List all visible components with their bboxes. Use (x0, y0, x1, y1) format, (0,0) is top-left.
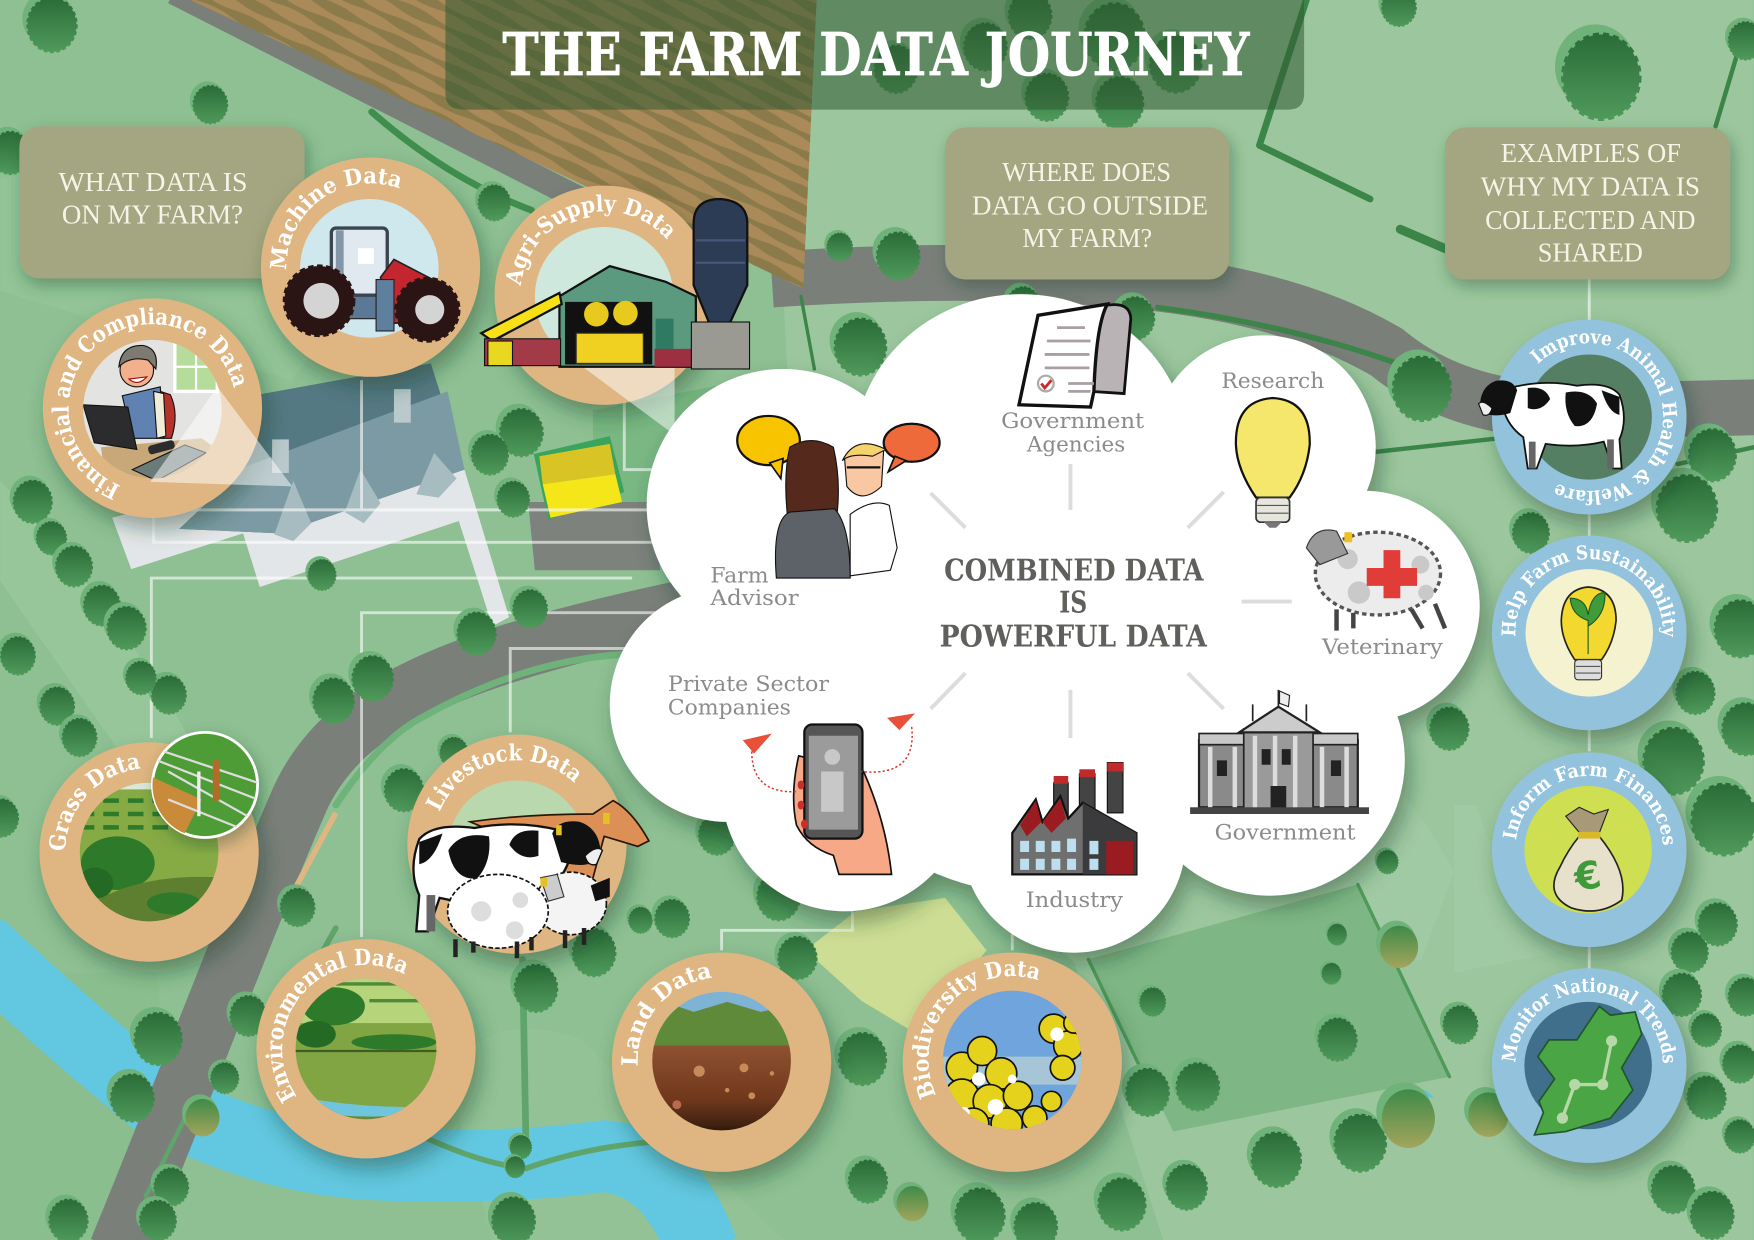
government agencies document: Government (1001, 409, 1144, 434)
private sector phone (668, 672, 915, 874)
callout: where data goes: DATA GO OUTSIDE (972, 191, 1208, 222)
veterinary sheep: Veterinary (1321, 635, 1443, 660)
farm advisor: Farm (710, 564, 769, 589)
circle: environmental data (252, 939, 492, 1182)
connector lines (151, 280, 1589, 971)
circle: land data: Land Data (621, 967, 712, 1066)
dark field (1088, 884, 1449, 1132)
cloud spokes (931, 464, 1292, 738)
industry factory (1012, 763, 1136, 913)
farm advisor: Advisor (709, 586, 799, 611)
circle: agri-supply data: Agri-Supply Data (506, 194, 673, 286)
circle: improve animal health and welfare (1478, 318, 1702, 536)
government agencies document (1001, 304, 1144, 458)
industry factory: Industry (1026, 888, 1124, 913)
title banner (445, 0, 1304, 110)
cloud panel (610, 294, 1480, 953)
yellow green meadow (805, 898, 987, 1034)
callout: why collected: SHARED (1538, 238, 1643, 269)
circle: grass data (34, 742, 274, 983)
inset: electric fence (152, 732, 258, 837)
circle: monitor national trends (1487, 967, 1703, 1185)
circle: financial and compliance data (38, 298, 292, 542)
heading: combined data: POWERFUL DATA (940, 619, 1207, 654)
government agencies document: Agencies (1026, 433, 1125, 458)
callout: what data: ON MY FARM? (62, 200, 243, 231)
circle: inform farm finances: Inform Farm Finances (1502, 766, 1673, 845)
farm advisor (709, 416, 940, 611)
circle: monitor national trends: Monitor National Trends (1501, 978, 1676, 1063)
veterinary sheep (1306, 530, 1445, 660)
government building: Government (1215, 821, 1356, 846)
farmyard and buildings (112, 363, 727, 626)
circle: help farm sustainability (1487, 534, 1703, 752)
callout: why collected (1445, 127, 1730, 280)
title banner: THE FARM DATA JOURNEY (502, 19, 1250, 89)
river (0, 945, 703, 1240)
circle: livestock data (402, 734, 650, 975)
callout: what data (19, 126, 305, 278)
research light bulb: Research (1221, 369, 1324, 394)
circle: machine data: Machine Data (270, 168, 400, 270)
circle: agri-supply data (479, 186, 750, 431)
callout: why collected: EXAMPLES OF (1501, 138, 1681, 169)
callout: where data goes: MY FARM? (1022, 223, 1152, 254)
circle: environmental data: Environmental Data (265, 948, 406, 1104)
circle: biodiversity data (898, 952, 1137, 1194)
circle: biodiversity data: Biodiversity Data (912, 961, 1038, 1100)
heading: combined data: IS (1059, 586, 1087, 621)
circle: improve animal health and welfare: Improve Animal Health & Welfare (1529, 333, 1678, 506)
callout: where data goes: WHERE DOES (1002, 157, 1171, 188)
private sector phone: Companies (668, 695, 791, 720)
private sector phone: Private Sector (668, 672, 830, 697)
circle: help farm sustainability: Help Farm Sustainability (1501, 545, 1676, 638)
circle: land data (607, 952, 847, 1196)
circle: inform farm finances (1487, 752, 1703, 968)
heading: combined data: COMBINED DATA (944, 553, 1204, 588)
pond (1387, 1086, 1434, 1098)
callout: why collected: WHY MY DATA IS (1481, 172, 1700, 203)
ploughed field (190, 0, 817, 288)
circle: grass data: Grass Data (49, 757, 140, 850)
callout: why collected: COLLECTED AND (1485, 205, 1695, 236)
research light bulb (1221, 369, 1324, 528)
heading: combined data (940, 553, 1207, 654)
circle: machine data (256, 158, 496, 400)
circle: financial and compliance data: Financial and Compliance Data (52, 307, 244, 500)
circle: livestock data: Livestock Data (425, 743, 580, 812)
circle: inform farm finances: € (1570, 852, 1604, 900)
callout: what data: WHAT DATA IS (59, 167, 247, 198)
callout: where data goes (945, 127, 1229, 280)
government building (1190, 690, 1369, 846)
